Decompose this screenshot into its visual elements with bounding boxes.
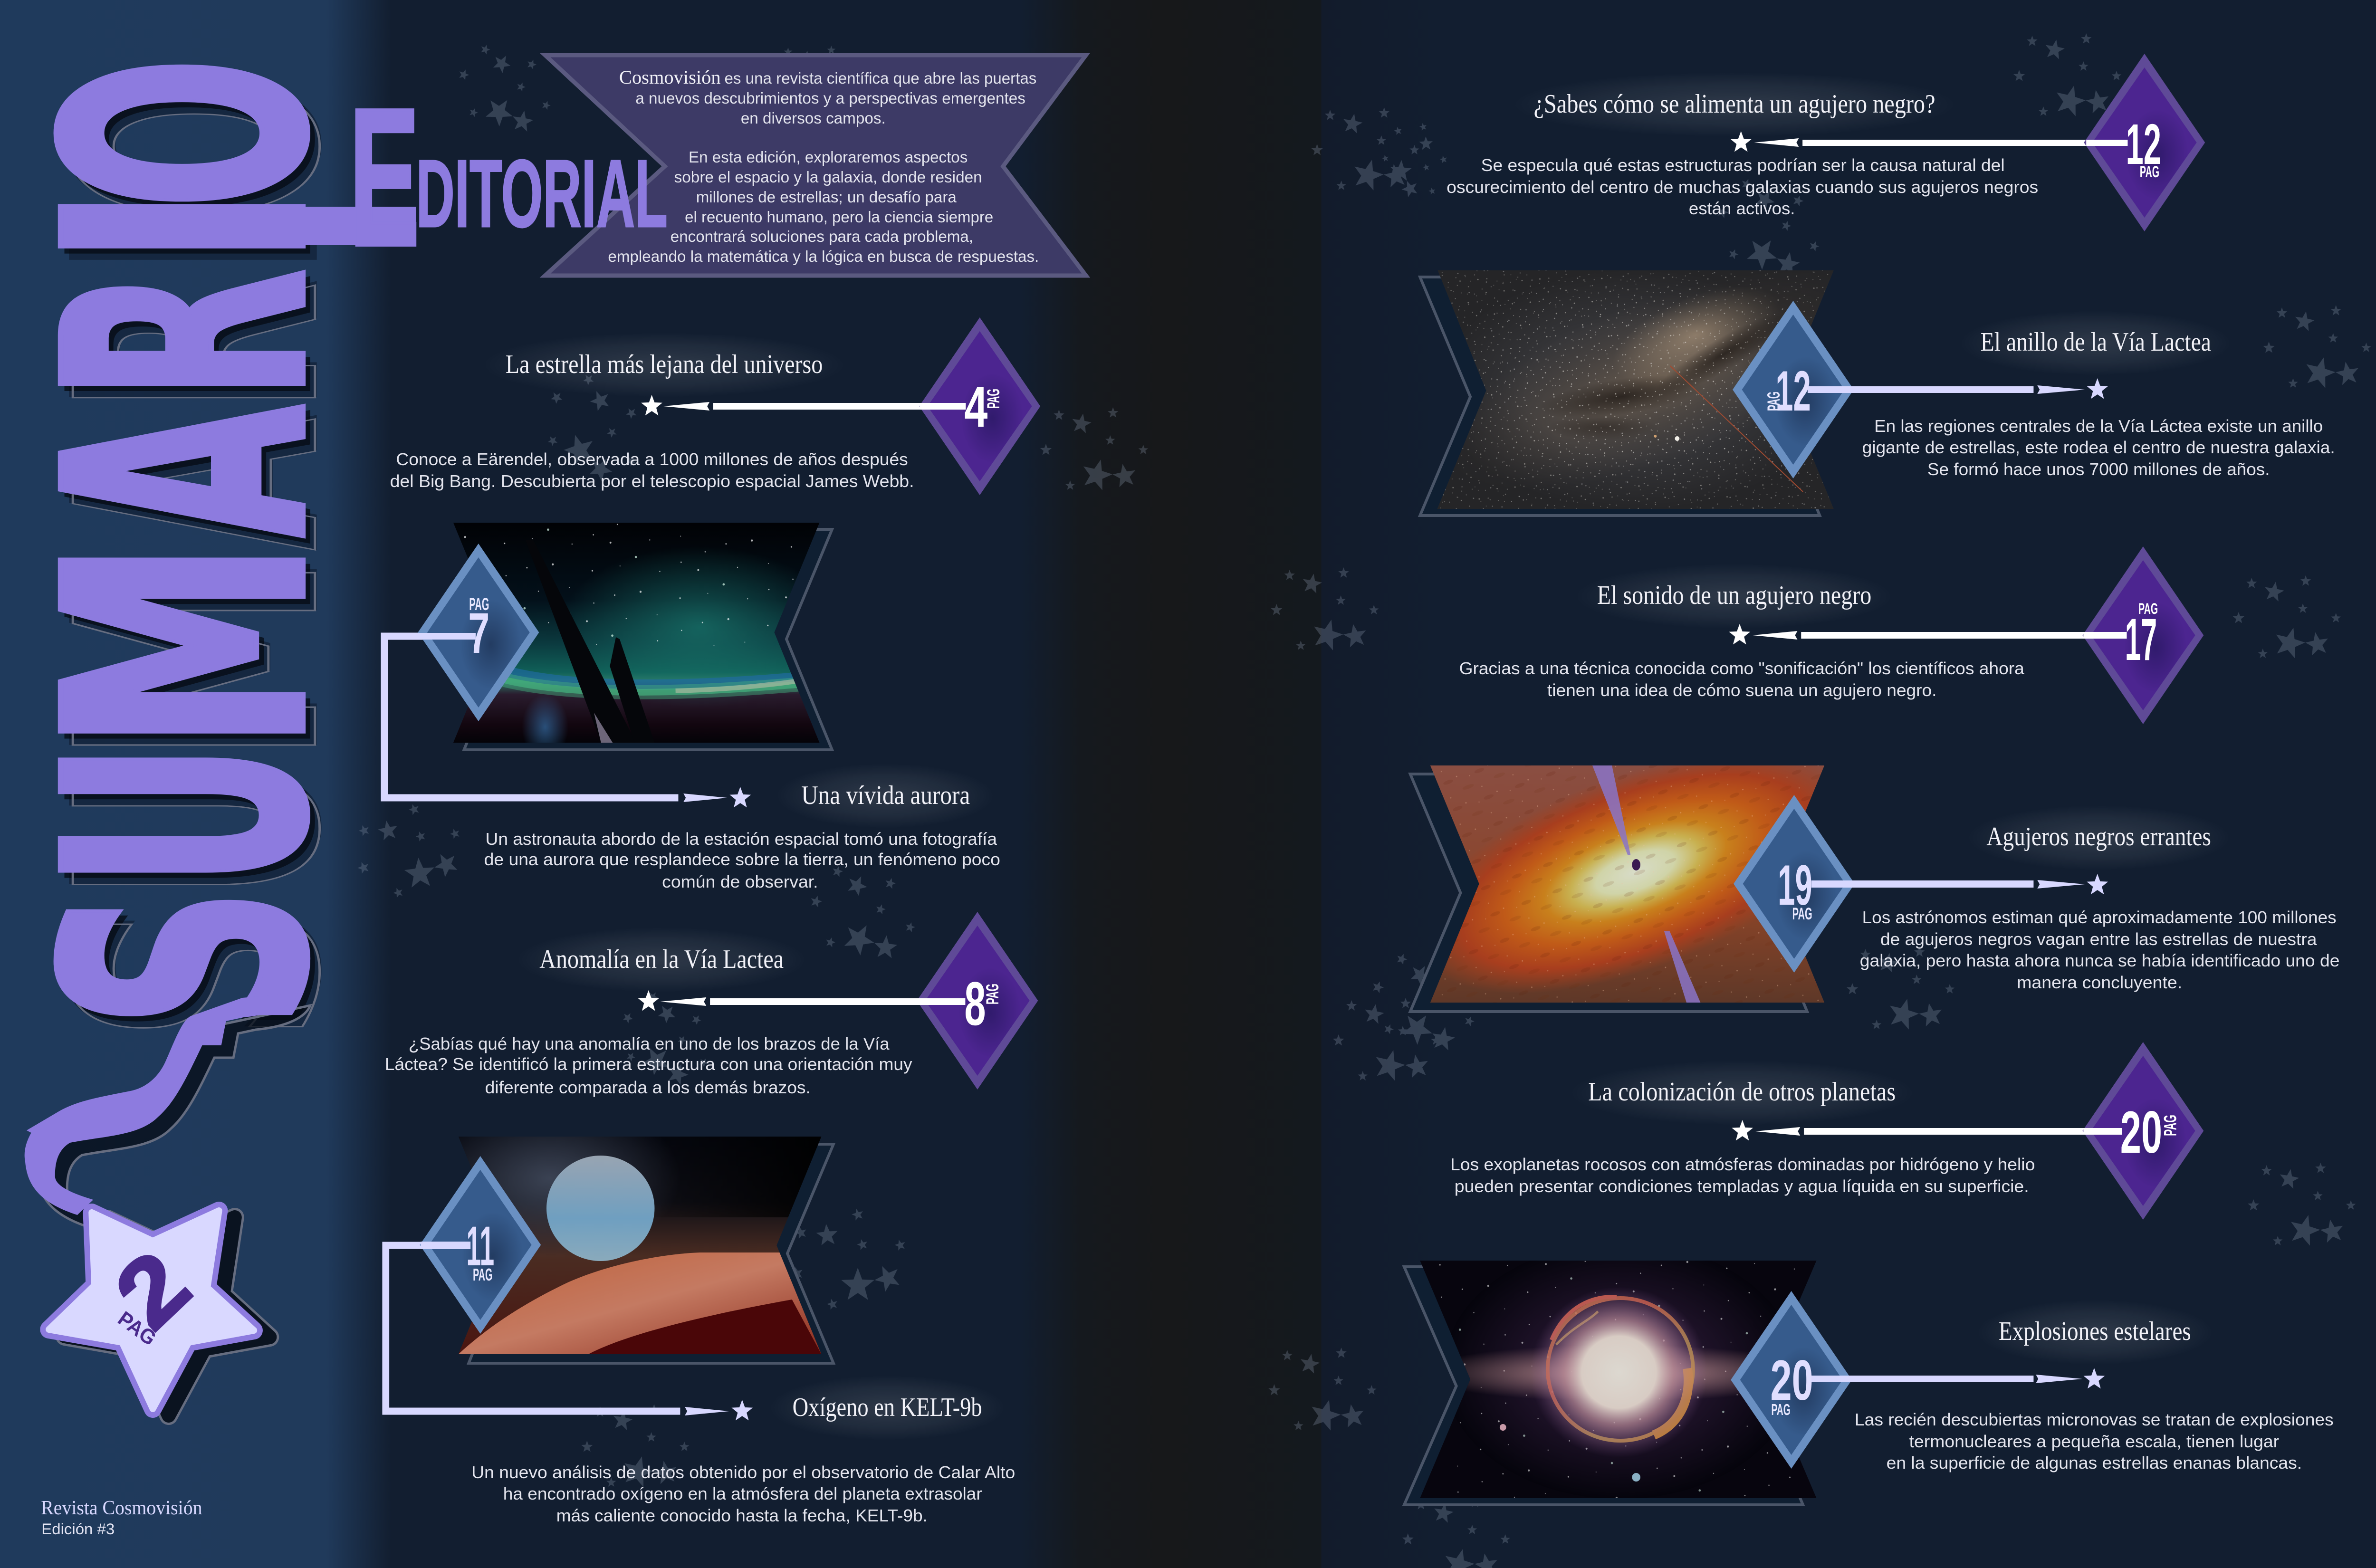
body text: manera concluyente. (2017, 973, 2182, 992)
page diamond: 19 (1778, 853, 1812, 917)
article: La colonización de otros planetas (1450, 1042, 2204, 1220)
editorial text: el recuento humano, pero la ciencia siempre (685, 208, 993, 226)
editorial text: Cosmovisión (619, 67, 721, 88)
page diamond: 12 (2126, 113, 2161, 176)
image frame (464, 529, 832, 750)
body text: tienen una idea de cómo suena un agujero negro. (1547, 681, 1936, 700)
body text: Se formó hace unos 7000 millones de años. (1927, 460, 2270, 479)
heading: Agujeros negros errantes (1986, 822, 2211, 851)
body text: Gracias a una técnica conocida como "sonificación" los científicos ahora (1459, 659, 2024, 678)
body text: oscurecimiento del centro de muchas galaxias cuando sus agujeros negros (1447, 178, 2038, 197)
page diamond: PAG (469, 594, 489, 614)
heading: El anillo de la Vía Lactea (1981, 327, 2211, 356)
heading: La estrella más lejana del universo (506, 350, 823, 379)
body text (1860, 908, 2340, 992)
title: SUMARIO: M (0, 540, 382, 751)
body text: pueden presentar condiciones templadas y agua líquida en su superficie. (1455, 1177, 2029, 1196)
editorial text: a nuevos descubrimientos y a perspectivas emergentes (635, 89, 1025, 107)
body text (1447, 156, 2038, 218)
page diamond: PAG (2140, 163, 2159, 181)
editorial text: encontrará soluciones para cada problema, (671, 228, 973, 245)
footer: magazine name and edition: Revista Cosmovisión (41, 1497, 202, 1519)
page diamond: 20 (1770, 1348, 1813, 1412)
body text: ¿Sabías qué hay una anomalía en uno de los brazos de la Vía (409, 1034, 890, 1053)
body text (1459, 659, 2024, 700)
panel: editorial ribbon (545, 55, 1086, 276)
body text: gigante de estrellas, este rodea el centro de nuestra galaxia. (1862, 438, 2335, 457)
page diamond: PAG (983, 389, 1003, 409)
body text (484, 830, 1000, 891)
image: milky way (1421, 226, 1896, 534)
page diamond: PAG (1771, 1401, 1791, 1418)
heading: Editorial: DITORIAL (416, 140, 668, 247)
editorial text (608, 67, 1039, 265)
body text: común de observar. (662, 872, 818, 891)
page diamond (420, 1156, 541, 1334)
arrow connector (1811, 1368, 2105, 1388)
title shadow and outline: SUMARIO: U (6, 754, 393, 899)
article: Oxígeno en KELT-9b (386, 1098, 1015, 1525)
page diamond: PAG (473, 1265, 492, 1284)
body text (390, 450, 914, 491)
body text: Láctea? Se identificó la primera estructura con una orientación muy (385, 1055, 912, 1074)
heading: Oxígeno en KELT-9b (793, 1393, 982, 1422)
title shadow and outline: SUMARIO: S (0, 893, 387, 1034)
page diamond: PAG (2138, 600, 2158, 617)
title shadow and outline: SUMARIO: U (0, 748, 387, 893)
title: SUMARIO: R (0, 268, 382, 400)
body text: de una aurora que resplandece sobre la tierra, un fenómeno poco (484, 850, 1000, 869)
editorial text: empleando la matemática y la lógica en busca de respuestas. (608, 248, 1039, 265)
title shadow and outline: SUMARIO: I (0, 191, 387, 272)
image frame (1410, 774, 1807, 1012)
body text (471, 1463, 1015, 1525)
title shadow and outline: SUMARIO: U (7, 756, 393, 901)
heading: Explosiones estelares (1999, 1317, 2191, 1346)
page diamond: 20 (2120, 1100, 2162, 1166)
page diamond: PAG (982, 984, 1002, 1004)
body text (1855, 1410, 2334, 1472)
title shadow and outline: SUMARIO: M (7, 553, 393, 765)
editorial text: en diversos campos. (741, 109, 886, 127)
body text: Los astrónomos estiman qué aproximadamente 100 millones (1862, 908, 2337, 927)
page diamond (2082, 1042, 2204, 1220)
editorial text: sobre el espacio y la galaxia, donde residen (674, 168, 982, 186)
heading: Anomalía en la Vía Lactea (539, 945, 784, 974)
body text: En las regiones centrales de la Vía Láctea existe un anillo (1874, 417, 2323, 436)
title: SUMARIO: A (0, 403, 382, 537)
heading: La colonización de otros planetas (1588, 1077, 1896, 1106)
title shadow and outline: SUMARIO: M (6, 551, 393, 763)
footer: magazine name and edition (41, 1497, 202, 1538)
image frame (1404, 1267, 1803, 1505)
arrow connector (641, 395, 966, 415)
page diamond (2082, 546, 2204, 724)
heading: El sonido de un agujero negro (1597, 581, 1871, 610)
body text (385, 1034, 912, 1097)
footer: magazine name and edition: Edición #3 (41, 1520, 115, 1538)
article: La estrella más lejana del universo (390, 317, 1040, 495)
page diamond: 11 (466, 1214, 494, 1277)
body text (1450, 1155, 2035, 1196)
title shadow and outline: SUMARIO: A (7, 417, 393, 551)
body text: galaxia, pero hasta ahora nunca se había identificado uno de (1860, 951, 2340, 970)
arrow connector (1730, 131, 2127, 152)
editorial text: En esta edición, exploraremos aspectos (689, 148, 968, 166)
arrow with star (683, 787, 751, 807)
title shadow and outline: SUMARIO: R (0, 274, 387, 406)
article: Explosiones estelares (1404, 1243, 2334, 1505)
title shadow and outline: SUMARIO: S (6, 899, 393, 1040)
page 2 star badge (49, 1211, 270, 1415)
arrow connector (1729, 624, 2127, 644)
page diamond (917, 912, 1038, 1090)
body text: Los exoplanetas rocosos con atmósferas dominadas por hidrógeno y helio (1450, 1155, 2035, 1174)
body text: más caliente conocido hasta la fecha, KELT-9b. (556, 1506, 928, 1525)
image: aurora (453, 523, 839, 760)
image frame (469, 1144, 834, 1363)
page diamond (1731, 1291, 1852, 1469)
image: black hole accretion disk (1388, 701, 1882, 1043)
title shadow and outline: SUMARIO: A (0, 409, 387, 543)
body text: de agujeros negros vagan entre las estrellas de nuestra (1880, 930, 2317, 949)
article: El sonido de un agujero negro (1459, 546, 2204, 724)
S tail ribbon (25, 993, 298, 1215)
page diamond: 17 (2125, 607, 2157, 673)
title shadow and outline: SUMARIO: A (6, 415, 393, 549)
body text: Un astronauta abordo de la estación espacial tomó una fotografía (486, 830, 997, 849)
editorial text: es una revista científica que abre las puertas (725, 69, 1036, 87)
heading: Editorial (298, 67, 668, 287)
title shadow and outline: SUMARIO: R (6, 280, 393, 411)
body text: Se especula qué estas estructuras podrían ser la causa natural del (1481, 156, 2005, 175)
article: Una vívida aurora (384, 523, 1000, 891)
page diamond (417, 544, 539, 721)
arrow connector (1808, 378, 2108, 399)
body text: están activos. (1689, 199, 1795, 218)
page diamond: 12 (1775, 359, 1811, 423)
page diamond: PAG (1763, 392, 1783, 411)
title shadow and outline: SUMARIO: S (7, 900, 393, 1042)
page diamond (1733, 301, 1854, 478)
body text (1862, 417, 2335, 479)
page diamond: 4 (964, 375, 987, 439)
page diamond (919, 317, 1040, 495)
page diamond (2084, 54, 2205, 231)
page diamond: PAG (1792, 905, 1812, 923)
article: ¿Sabes cómo se alimenta un agujero negro? (1447, 54, 2205, 231)
image frame (1420, 277, 1820, 516)
body text: termonucleares a pequeña escala, tienen lugar (1909, 1432, 2279, 1451)
title shadow and outline: SUMARIO (0, 63, 393, 1227)
page diamond: 8 (964, 969, 986, 1038)
arrow connector (1732, 1120, 2122, 1140)
article: Agujeros negros errantes (1388, 701, 2340, 1043)
connector line (386, 1245, 680, 1411)
arrow connector (1811, 874, 2108, 894)
heading: Una vívida aurora (801, 781, 970, 810)
body text: Un nuevo análisis de datos obtenido por el observatorio de Calar Alto (471, 1463, 1015, 1482)
article: El anillo de la Vía Lactea (1420, 226, 2335, 534)
PAG label star: PAG (114, 1307, 160, 1350)
article: Anomalía en la Vía Lactea (385, 912, 1038, 1097)
title: SUMARIO: S (0, 887, 382, 1029)
body text: Conoce a Eärendel, observada a 1000 millones de años después (396, 450, 908, 469)
connector line (384, 636, 678, 798)
heading: Editorial: E (349, 67, 420, 287)
page diamond: 7 (468, 602, 489, 665)
title shadow and outline: SUMARIO: R (7, 282, 393, 413)
title: SUMARIO: I (0, 186, 382, 267)
body text: Las recién descubiertas micronovas se tratan de explosiones (1855, 1410, 2334, 1429)
editorial text: millones de estrellas; un desafío para (696, 188, 957, 206)
page diamond (1734, 795, 1855, 973)
body text: ha encontrado oxígeno en la atmósfera del planeta extrasolar (503, 1484, 982, 1503)
body text: en la superficie de algunas estrellas enanas blancas. (1887, 1453, 2302, 1472)
image: stellar explosion (1418, 1243, 1819, 1499)
body text: del Big Bang. Descubierta por el telescopio espacial James Webb. (390, 472, 914, 491)
arrow with star (685, 1400, 753, 1420)
title: SUMARIO: U (0, 743, 382, 888)
page number 2: 2 (96, 1231, 209, 1348)
heading: ¿Sabes cómo se alimenta un agujero negro? (1533, 89, 1935, 118)
title: SUMARIO (0, 57, 382, 1029)
title shadow and outline: SUMARIO: I (6, 197, 393, 278)
arrow connector (638, 990, 965, 1011)
body text: diferente comparada a los demás brazos. (485, 1078, 811, 1097)
image: planet and moon (419, 1098, 821, 1354)
title shadow and outline: SUMARIO: M (0, 545, 387, 757)
page diamond: PAG (2160, 1115, 2180, 1136)
